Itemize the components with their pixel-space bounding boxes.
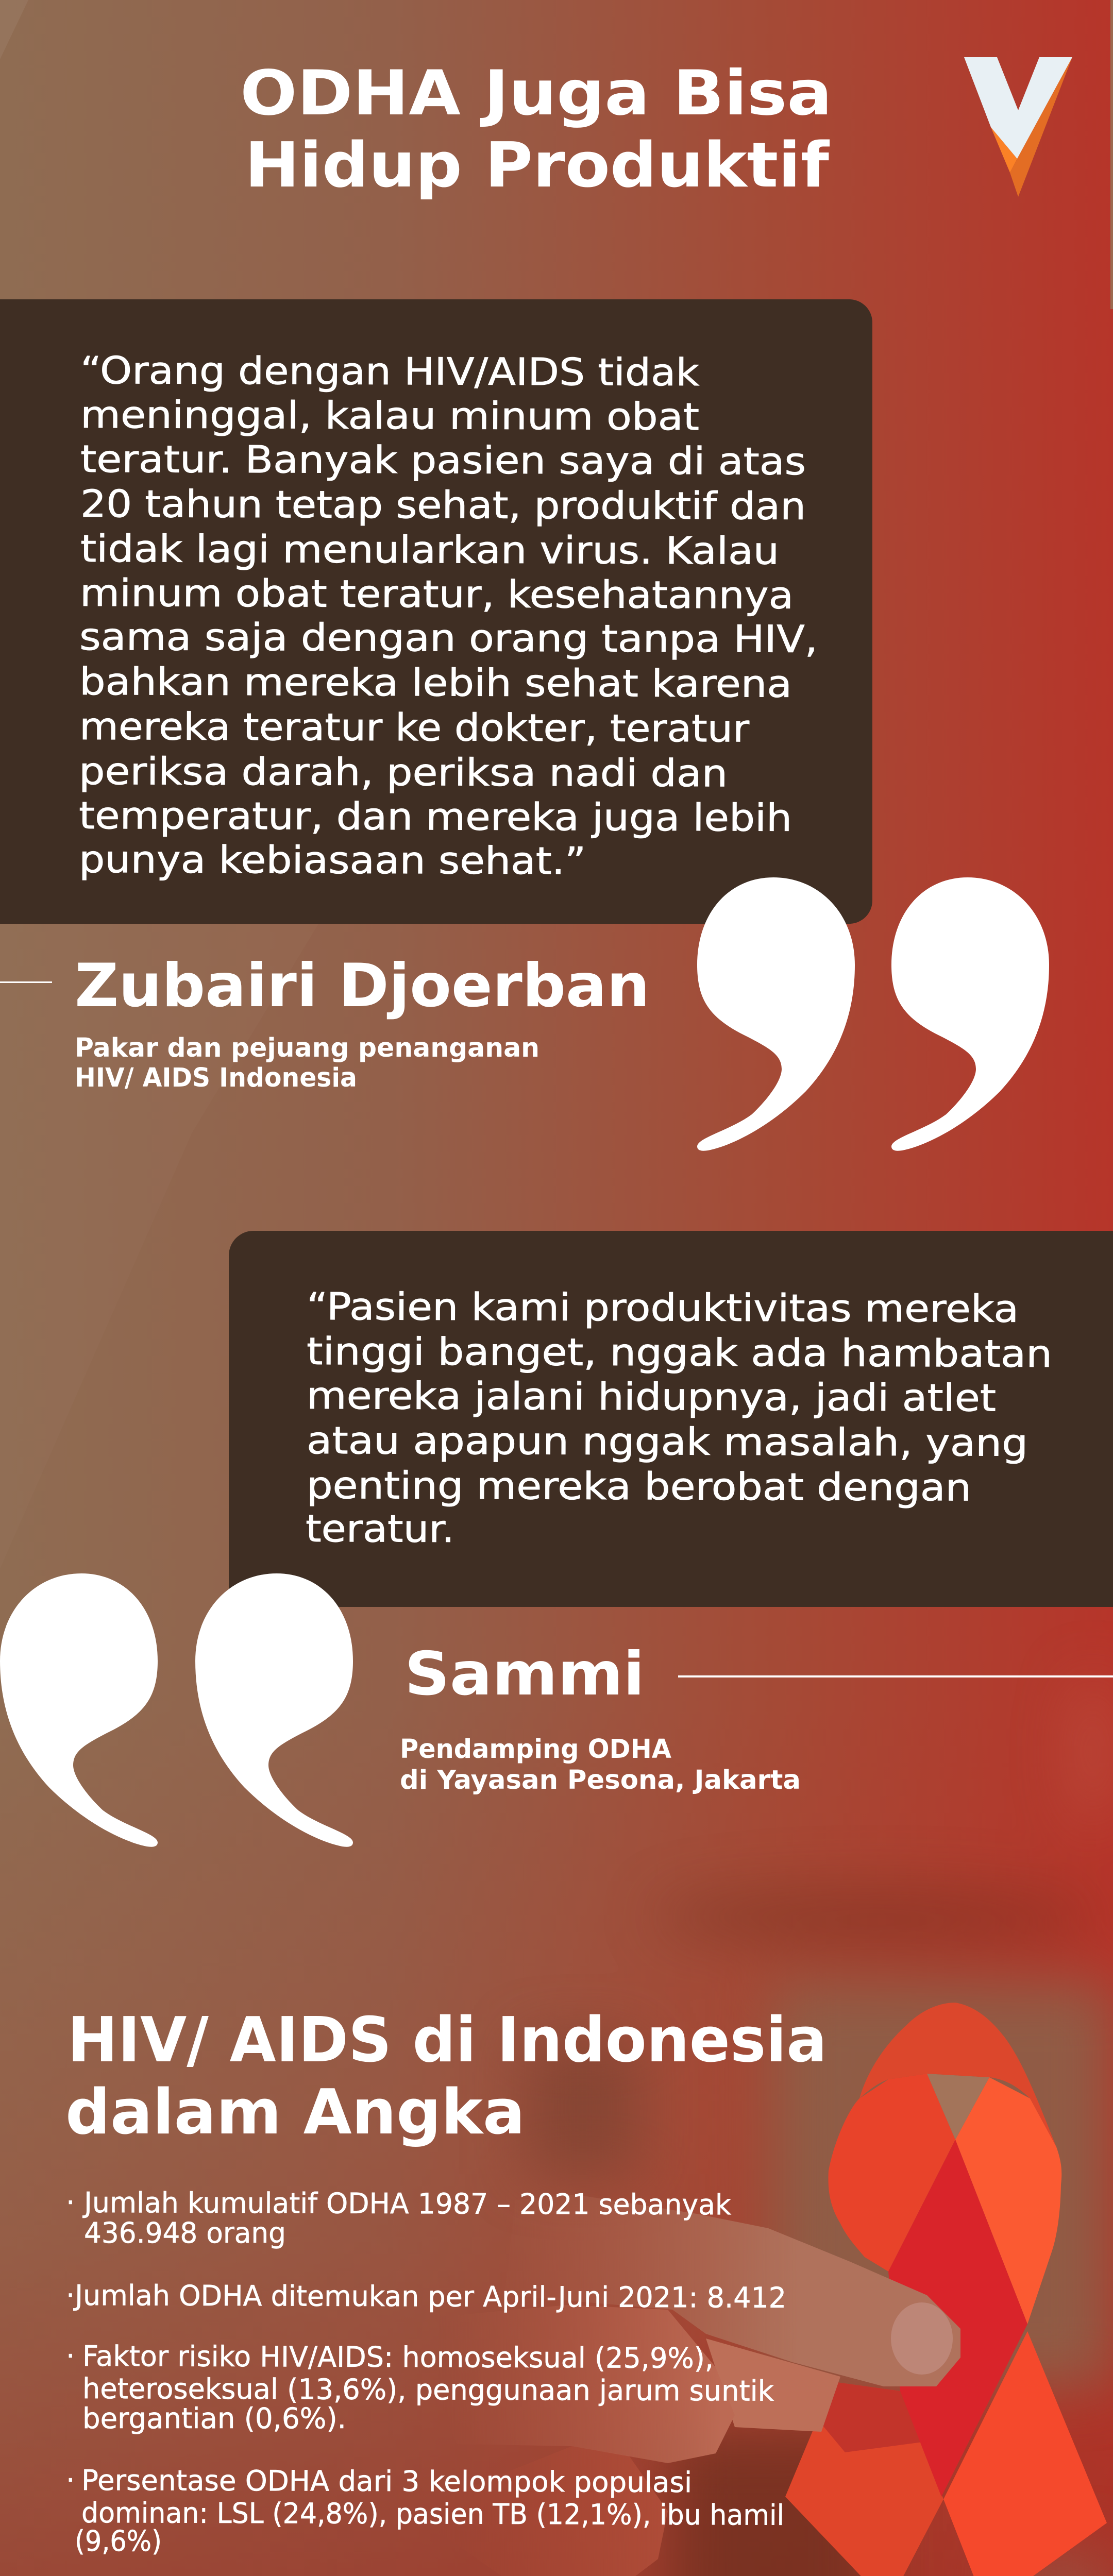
speaker: Zubairi Djoerban — [0, 951, 650, 1093]
icon: closing quotation marks — [697, 877, 1049, 1151]
speaker: Sammi: di Yayasan Pesona, Jakarta — [400, 1765, 801, 1795]
text block: statistics list: (9,6%) — [75, 2524, 162, 2557]
text block: statistics list: bergantian (0,6%). — [82, 2402, 346, 2435]
quote one text: bahkan mereka lebih sehat karena — [79, 660, 792, 706]
speaker: Zubairi Djoerban: Pakar dan pejuang penanganan — [75, 1033, 539, 1063]
speaker: Zubairi Djoerban: Zubairi Djoerban — [75, 951, 650, 1021]
panel: quote one — [0, 299, 872, 924]
quote two text: teratur. — [306, 1507, 454, 1551]
quote one text: punya kebiasaan sehat.” — [79, 838, 586, 883]
quote two text: mereka jalani hidupnya, jadi atlet — [307, 1374, 996, 1420]
quote two text: atau apapun nggak masalah, yang — [307, 1419, 1028, 1465]
quote one text: sama saja dengan orang tanpa HIV, — [79, 615, 818, 662]
text block: statistics list: · — [66, 2340, 75, 2372]
background photo: blurred upper room — [0, 1674, 1113, 2576]
panel: quote two — [229, 1231, 1113, 1607]
title: ODHA Juga Bisa — [240, 58, 832, 129]
icon: V logo — [964, 57, 1072, 197]
title: Hidup Produktif — [245, 130, 830, 201]
quote one text: meninggal, kalau minum obat — [80, 393, 699, 439]
text block: statistics list: ·Jumlah ODHA ditemukan per April-Juni 2021: 8.412 — [66, 2279, 786, 2314]
text block: statistics list: Jumlah kumulatif ODHA 1987 – 2021 sebanyak — [82, 2186, 731, 2221]
text block: statistics list: Persentase ODHA dari 3 kelompok populasi — [81, 2464, 692, 2499]
quote two text: tinggi banget, nggak ada hambatan — [307, 1330, 1052, 1376]
quote one text: teratur. Banyak pasien saya di atas — [80, 437, 806, 484]
quote one text — [79, 349, 818, 883]
quote one text: mereka teratur ke dokter, teratur — [79, 705, 750, 751]
quote two text: penting mereka berobat dengan — [307, 1464, 971, 1510]
title — [240, 58, 832, 201]
speaker: Sammi — [400, 1639, 1113, 1795]
hand fingers — [409, 2195, 960, 2576]
quote one text: minum obat teratur, kesehatannya — [80, 571, 794, 618]
text block: statistics list: · — [66, 2464, 75, 2497]
quote one text: periksa darah, periksa nadi dan — [79, 750, 728, 795]
text block: statistics list: · — [66, 2186, 75, 2219]
text block: statistics list: heteroseksual (13,6%), penggunaan jarum suntik — [82, 2372, 774, 2408]
speaker: Sammi: Sammi — [404, 1639, 645, 1709]
speaker: Zubairi Djoerban: HIV/ AIDS Indonesia — [75, 1063, 357, 1093]
quote two text: “Pasien kami produktivitas mereka — [307, 1285, 1019, 1331]
text block: statistics list: 436.948 orang — [84, 2216, 286, 2249]
quote two text — [306, 1285, 1052, 1551]
heading: HIV/AIDS di Indonesia dalam Angka: dalam Angka — [65, 2077, 525, 2148]
icon: opening quotation marks — [0, 1573, 353, 1847]
quote one text: temperatur, dan mereka juga lebih — [79, 794, 792, 840]
quote one text: tidak lagi menularkan virus. Kalau — [80, 527, 779, 573]
ribbon: top red ribbon — [785, 2003, 1107, 2576]
heading: HIV/AIDS di Indonesia dalam Angka: HIV/ AIDS di Indonesia — [68, 2005, 827, 2076]
text block: statistics list: Faktor risiko HIV/AIDS: homoseksual (25,9%), — [82, 2340, 714, 2375]
text block: statistics list: dominan: LSL (24,8%), pasien TB (12,1%), ibu hamil — [81, 2496, 784, 2532]
background photo: hand holding ribbon, top — [409, 2003, 1107, 2576]
heading: HIV/AIDS di Indonesia dalam Angka — [65, 2005, 827, 2148]
speaker: Sammi: Pendamping ODHA — [400, 1734, 672, 1765]
quote one text: “Orang dengan HIV/AIDS tidak — [80, 349, 700, 395]
text block: statistics list — [66, 2186, 786, 2576]
quote one text: 20 tahun tetap sehat, produktif dan — [80, 482, 806, 529]
